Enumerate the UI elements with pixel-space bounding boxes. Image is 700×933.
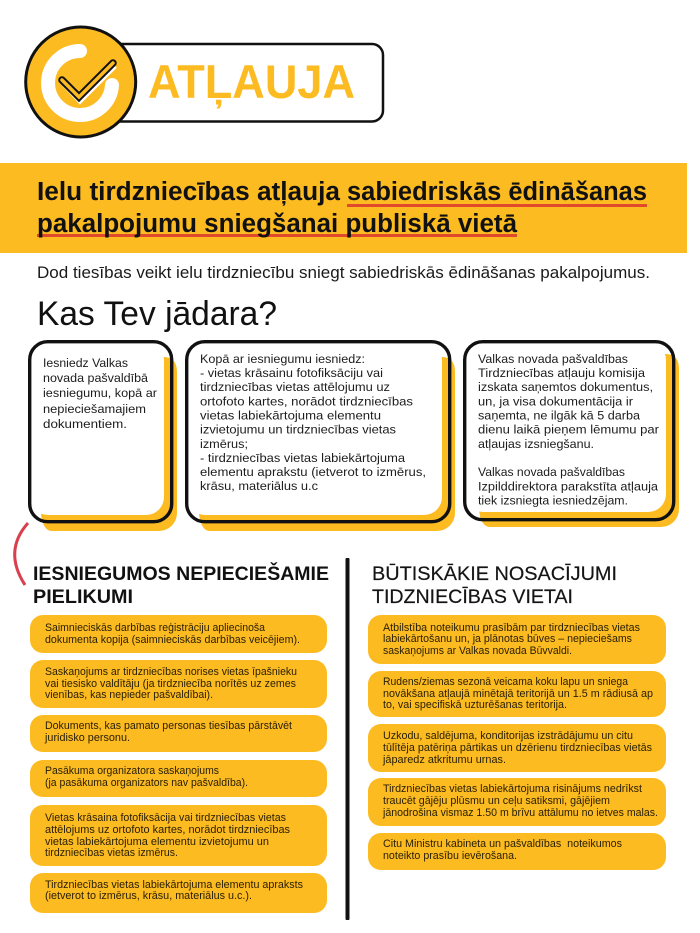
item: registration copy: dokumenta kopija (saimnieciskās darbības veicējiem). — [45, 634, 300, 646]
item: element description: Tirdzniecības vietas labiekārtojuma elementu apraksts — [45, 879, 304, 891]
heading: key conditions: BŪTISKĀKIE NOSACĪJUMI — [372, 564, 617, 585]
step 3 text: Valkas novada pašvaldības — [478, 465, 625, 479]
item: seasonal cleaning: novākšana atļaujā minētajā teritorijā un 1.5 m rādiusā ap — [383, 688, 653, 700]
step 1 text: nepieciešamajiem — [43, 402, 146, 416]
decorative red arc — [15, 523, 28, 585]
logo badge: ATĻAUJA — [26, 27, 383, 137]
subtitle: Dod tiesības veikt ielu tirdzniecību sniegt sabiedriskās ēdināšanas pakalpojumus. — [37, 263, 650, 282]
item: waste bins: tūlītēja patēriņa pārtikas un dzērienu tirdzniecības vietās — [383, 742, 653, 754]
item: site photo: tirdzniecības vietas izmērus. — [45, 847, 178, 859]
step 3 text: un, ja visa dokumentācija ir — [478, 394, 633, 408]
item: compliance: labiekārtošanu un, ja plānotas būves – nepieciešams — [383, 633, 633, 645]
title underlines — [37, 204, 647, 237]
panel: step 1 — [30, 342, 177, 531]
item: representation document — [30, 715, 327, 752]
step 2 text: vietas labiekārtojuma elementu — [200, 409, 381, 423]
item: organizer agreement — [30, 760, 327, 797]
step 3 text: saņemta, ne ilgāk kā 5 darba — [478, 409, 640, 423]
item: waste bins: jāparedz atkritumu urnas. — [382, 754, 506, 766]
heading: Kas Tev jādara?: Kas Tev jādara? — [37, 295, 277, 333]
heading: required attachments: PIELIKUMI — [33, 587, 133, 608]
item: owner agreement — [30, 660, 327, 708]
title text: pakalpojumu sniegšanai publiskā vietā — [37, 210, 518, 238]
step 1 text: dokumentiem. — [43, 417, 127, 431]
item: pedestrian flow: traucēt gājēju plūsmu un ceļu satiksmi, gājējiem — [383, 795, 610, 807]
item: compliance — [368, 615, 666, 664]
step 2 text: ortofoto kartes, norādot tirdzniecības — [200, 394, 413, 408]
step 3 text: Tirdzniecības atļauju komisija — [478, 366, 645, 380]
heading: key conditions — [372, 564, 617, 608]
panel: step 2 — [187, 342, 455, 531]
step 3 text: Izpilddirektora parakstīta atļauja — [478, 480, 658, 494]
step 2 text: izmērus; — [200, 437, 248, 451]
title band — [0, 163, 687, 253]
step 2 text: Kopā ar iesniegumu iesniedz: — [200, 352, 365, 366]
item: compliance: saskaņojums ar Valkas novada Būvvaldi. — [383, 645, 572, 657]
title text: sabiedriskās ēdināšanas — [347, 178, 647, 206]
item: pedestrian flow: jānodrošina vismaz 1.50 m brīvu attālumu no ietves malas. — [382, 807, 658, 819]
icon: yellow circle with check mark — [26, 27, 136, 137]
item: registration copy — [30, 615, 327, 653]
list: required attachments — [30, 615, 327, 913]
step 1 text: Iesniedz Valkas — [43, 356, 128, 370]
title text: Ielu tirdzniecības atļauja — [37, 178, 341, 206]
step 2 text: - tirdzniecības vietas labiekārtojuma — [200, 451, 405, 465]
item: site photo: attēlojums uz ortofoto kartes, norādot tirdzniecības — [45, 824, 291, 836]
step 3 text — [478, 352, 659, 508]
item: waste bins — [368, 724, 666, 772]
heading: required attachments — [33, 563, 329, 608]
step 3 text: atļaujas izsniegšanu. — [478, 437, 594, 451]
step 3 text: Valkas novada pašvaldības — [478, 352, 628, 366]
item: pedestrian flow — [368, 778, 666, 826]
panel: step 3 — [465, 342, 679, 527]
item: representation document: Dokuments, kas pamato personas tiesības pārstāvēt — [45, 720, 292, 732]
item: owner agreement: vai tiesisko valdītāju (ja tirdzniecība norītēs uz zemes — [45, 678, 297, 690]
item: seasonal cleaning: Rudens/ziemas sezonā veicama koku lapu un sniega — [383, 676, 628, 688]
item: regulations — [368, 833, 666, 870]
step 2 text: - vietas krāsainu fotofiksāciju vai — [200, 366, 383, 380]
step 1 text: iesniegumu, kopā ar — [43, 386, 157, 400]
badge label box — [100, 44, 383, 122]
badge title: ATĻAUJA — [148, 55, 355, 109]
item: registration copy: Saimnieciskās darbības reģistrāciju apliecinoša — [45, 621, 265, 634]
item: owner agreement: Saskaņojums ar tirdzniecības norises vietas īpašnieku — [45, 666, 297, 678]
item: seasonal cleaning: to, vai specifiskā uzturēšanas teritorija. — [383, 699, 567, 711]
column divider — [346, 558, 350, 920]
item: owner agreement: vienības, kas nepieder pašvaldībai). — [45, 689, 213, 701]
item: seasonal cleaning — [368, 671, 666, 717]
step 2 text: krāsu, materiālus u.c — [200, 479, 318, 493]
step 1 text — [43, 356, 157, 431]
step 2 text: izvietojumu un tirdzniecības vietas — [200, 423, 396, 437]
step 1 text: novada pašvaldībā — [43, 371, 148, 385]
step 2 text: tirdzniecības vietas attēlojumu uz — [200, 380, 390, 394]
heading: required attachments: IESNIEGUMOS NEPIECIEŠAMIE — [33, 563, 329, 585]
step 2 text — [200, 352, 426, 493]
item: element description: (ietverot to izmērus, krāsu, materiālus u.c.). — [45, 890, 252, 902]
list: key conditions — [368, 615, 666, 870]
item: element description — [30, 873, 327, 913]
item: compliance: Atbilstība noteikumu prasībām par tirdzniecības vietas — [383, 622, 641, 634]
item: pedestrian flow: Tirdzniecības vietas labiekārtojuma risinājums nedrīkst — [383, 783, 642, 795]
item: site photo: Vietas krāsaina fotofiksācija vai tirdzniecības vietas — [45, 812, 287, 824]
heading: key conditions: TIDZNIECĪBAS VIETAI — [372, 587, 573, 608]
item: waste bins: Uzkodu, saldējuma, konditorijas izstrādājumu un citu — [383, 730, 633, 742]
item: representation document: juridisko personu. — [44, 732, 130, 744]
item: organizer agreement: (ja pasākuma organizators nav pašvaldība). — [45, 777, 248, 789]
item: site photo: vietas labiekārtojuma elementu izvietojumu un — [45, 836, 269, 848]
item: regulations: Citu Ministru kabineta un pašvaldības noteikumos — [383, 838, 623, 850]
item: organizer agreement: Pasākuma organizatora saskaņojums — [45, 765, 220, 777]
step 3 text: tiek izsniegta iesniedzējam. — [478, 494, 628, 508]
item: site photo — [30, 805, 327, 866]
item: regulations: noteikto prasību ievērošana. — [383, 850, 517, 862]
step 2 text: elementu aprakstu (ietverot to izmērus, — [200, 465, 426, 479]
step 3 text: izskata saņemtos dokumentus, — [478, 380, 653, 394]
step 3 text: dienu laikā pieņem lēmumu par — [478, 423, 659, 437]
title text — [37, 178, 647, 238]
